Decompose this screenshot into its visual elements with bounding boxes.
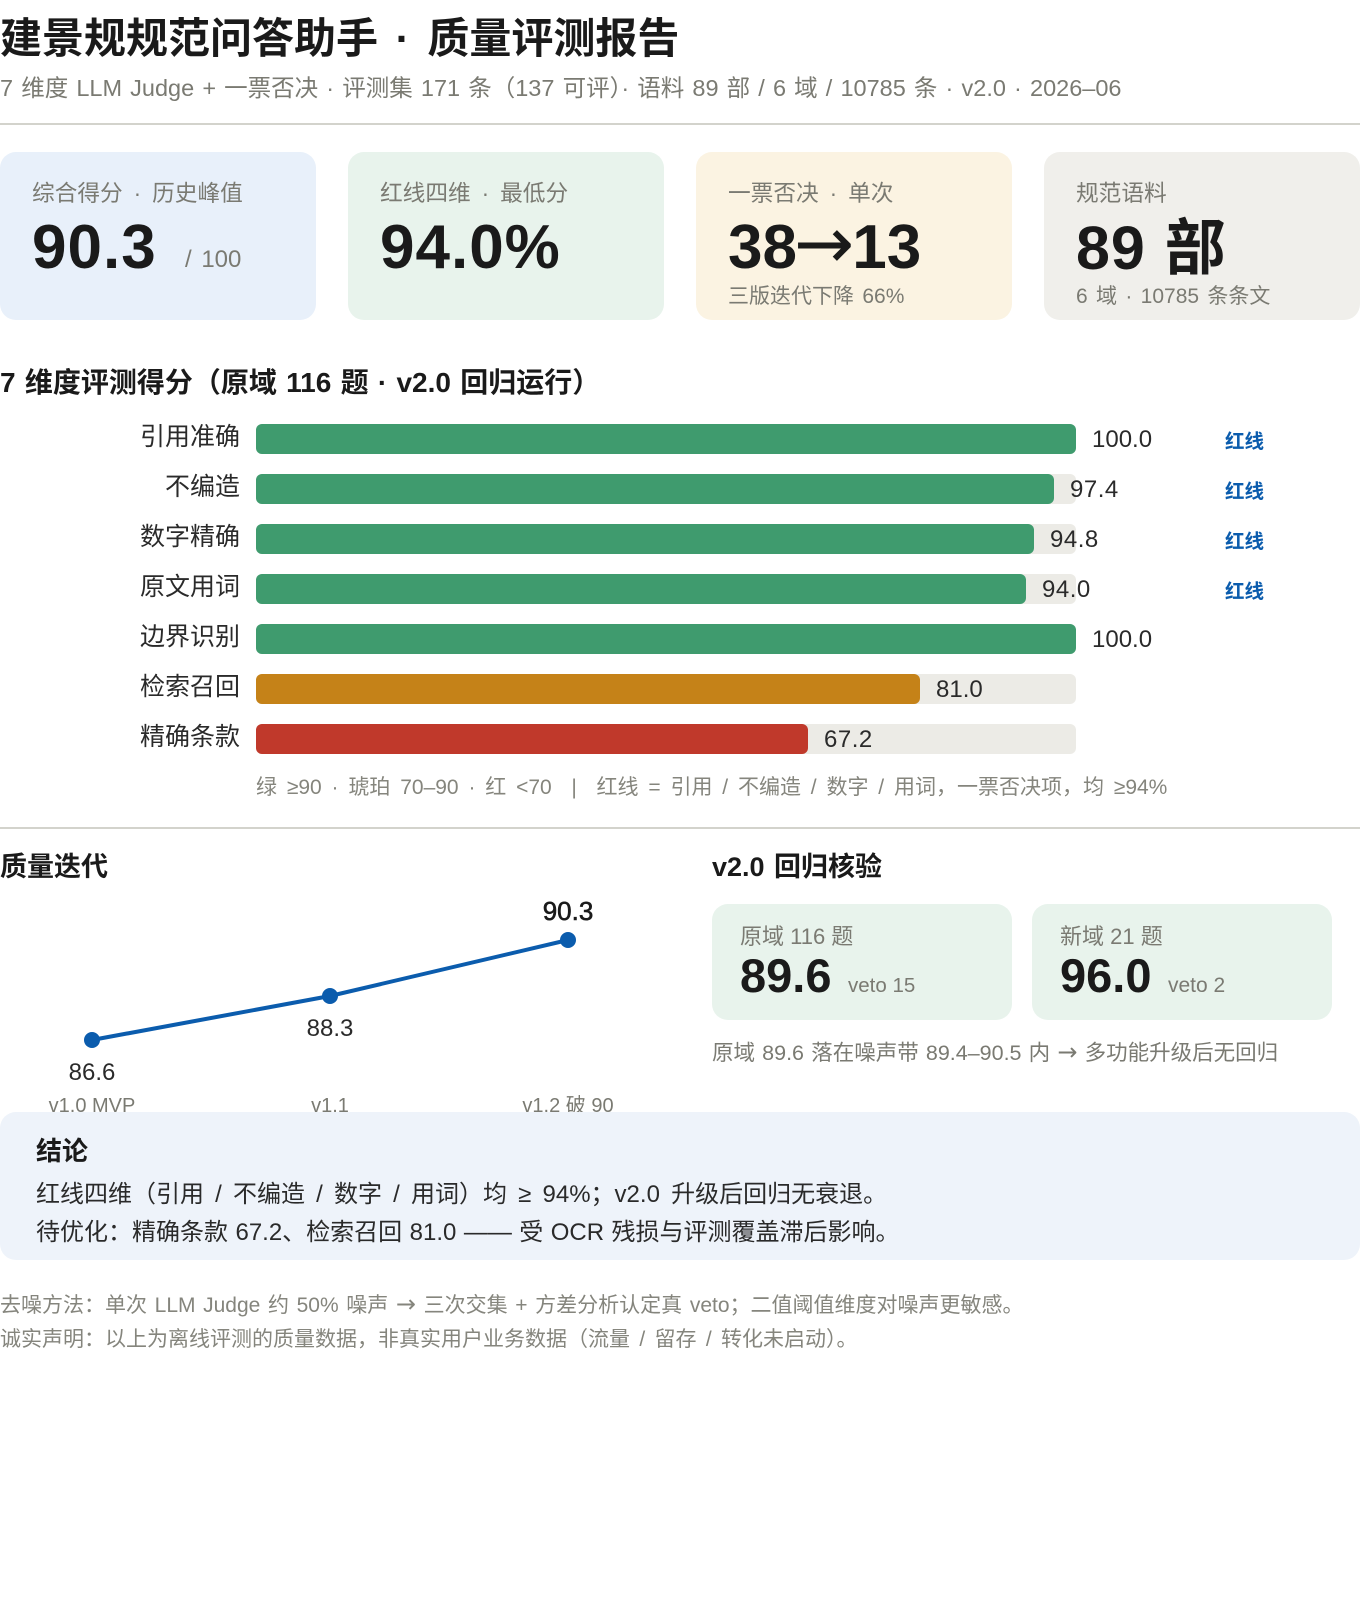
row: no fabrication — [165, 473, 1264, 504]
conclusion line 1: 红线四维（引用 / 不编造 / 数字 / 用词）均 ≥ 94%；v2.0 升级后回归无衰退。 — [36, 1181, 887, 1208]
regression note: 原域 89.6 落在噪声带 89.4–90.5 内 → 多功能升级后无回归 — [712, 1038, 1278, 1066]
line chart: quality iteration: v1.2 破 90 — [522, 1094, 614, 1117]
row: retrieval recall — [140, 673, 1076, 704]
row: numeric accuracy: 红线 — [1225, 531, 1264, 553]
row: original wording: 原文用词 — [140, 573, 240, 601]
title: 建景规规范问答助手 · 质量评测报告 — [0, 15, 679, 62]
label: red line: 红线四维 · 最低分 — [380, 180, 568, 206]
value: 94.0%: 94.0% — [380, 213, 561, 282]
note: domains and clauses: 6 域 · 10785 条条文 — [1076, 285, 1270, 308]
panel: conclusion — [0, 1112, 1360, 1260]
row: original wording: 94.0 — [1042, 576, 1091, 603]
heading: conclusion: 结论 — [36, 1136, 88, 1166]
value: 89 parts: 89 部 — [1076, 214, 1227, 282]
row: retrieval recall: 81.0 — [936, 676, 983, 703]
veto count: veto 2 — [1168, 974, 1225, 997]
heading: regression check: v2.0 回归核验 — [712, 852, 882, 882]
value: 38 to 13: 38→13 — [728, 201, 921, 285]
label: corpus: 规范语料 — [1076, 180, 1167, 206]
conclusion line 2: 待优化：精确条款 67.2、检索召回 81.0 —— 受 OCR 残损与评测覆盖滞后影响。 — [36, 1219, 900, 1246]
bar chart: seven dimension scores — [140, 423, 1264, 799]
row: boundary recognition — [140, 623, 1152, 654]
unit: out of 100: / 100 — [185, 246, 241, 273]
row: precise clause: 67.2 — [824, 726, 873, 753]
line chart: quality iteration: 90.3 — [543, 896, 593, 926]
row: no fabrication: 红线 — [1225, 481, 1264, 503]
row: precise clause — [140, 723, 1076, 754]
row: no fabrication: 97.4 — [1070, 476, 1119, 503]
panel: veto — [696, 152, 1012, 320]
line chart: quality iteration — [48, 896, 614, 1117]
legend: 绿 ≥90 · 琥珀 70–90 · 红 <70 | 红线 = 引用 / 不编造 / 数字 / 用词，一票否决项，均 ≥94% — [256, 776, 1167, 799]
row: original wording — [140, 573, 1264, 604]
heading: quality iteration: 质量迭代 — [0, 852, 108, 882]
panel: original domain — [712, 904, 1012, 1020]
note: drop 66%: 三版迭代下降 66% — [728, 285, 904, 308]
label: overall score: 综合得分 · 历史峰值 — [32, 180, 243, 206]
value: 96.0: 96.0 — [1060, 949, 1151, 1002]
panel: corpus — [1044, 152, 1360, 320]
row: numeric accuracy: 94.8 — [1050, 526, 1099, 553]
row: boundary recognition: 100.0 — [1092, 626, 1152, 653]
row: citation accuracy: 红线 — [1225, 431, 1264, 453]
label: new domain: 新域 21 题 — [1060, 924, 1163, 949]
row: precise clause: 精确条款 — [140, 723, 240, 751]
row: boundary recognition: 边界识别 — [140, 623, 240, 651]
heading: seven dimensions: 7 维度评测得分（原域 116 题 · v2.0 回归运行） — [0, 367, 600, 398]
line chart: quality iteration: v1.0 MVP — [49, 1095, 135, 1117]
row: numeric accuracy — [140, 523, 1264, 554]
row: original wording: 红线 — [1225, 581, 1264, 603]
line chart: quality iteration: 88.3 — [307, 1015, 353, 1042]
row: citation accuracy — [140, 423, 1264, 454]
row: retrieval recall: 检索召回 — [140, 673, 240, 701]
footnote: honesty statement: 诚实声明：以上为离线评测的质量数据，非真实用户业务数据（流量 / 留存 / 转化未启动）。 — [0, 1328, 858, 1351]
row: numeric accuracy: 数字精确 — [140, 523, 240, 551]
line chart: quality iteration: 86.6 — [69, 1059, 115, 1086]
veto count: veto 15 — [848, 974, 915, 997]
row: citation accuracy: 引用准确 — [140, 423, 240, 451]
panel: overall score — [0, 152, 316, 320]
value: 89.6: 89.6 — [740, 949, 831, 1002]
panel: red line minimum — [348, 152, 664, 320]
label: veto: 一票否决 · 单次 — [728, 180, 894, 206]
subtitle: 7 维度 LLM Judge + 一票否决 · 评测集 171 条（137 可评）· 语料 89 部 / 6 域 / 10785 条 · v2.0 · 2026–06 — [0, 75, 1122, 101]
row: citation accuracy: 100.0 — [1092, 426, 1152, 453]
label: original domain: 原域 116 题 — [740, 924, 853, 949]
row: no fabrication: 不编造 — [165, 473, 240, 501]
line chart: quality iteration: v1.1 — [311, 1095, 349, 1117]
value: 90.3: 90.3 — [32, 213, 157, 282]
panel: new domain — [1032, 904, 1332, 1020]
footnote: denoising method: 去噪方法：单次 LLM Judge 约 50% 噪声 → 三次交集 + 方差分析认定真 veto；二值阈值维度对噪声更敏感。 — [0, 1290, 1024, 1318]
